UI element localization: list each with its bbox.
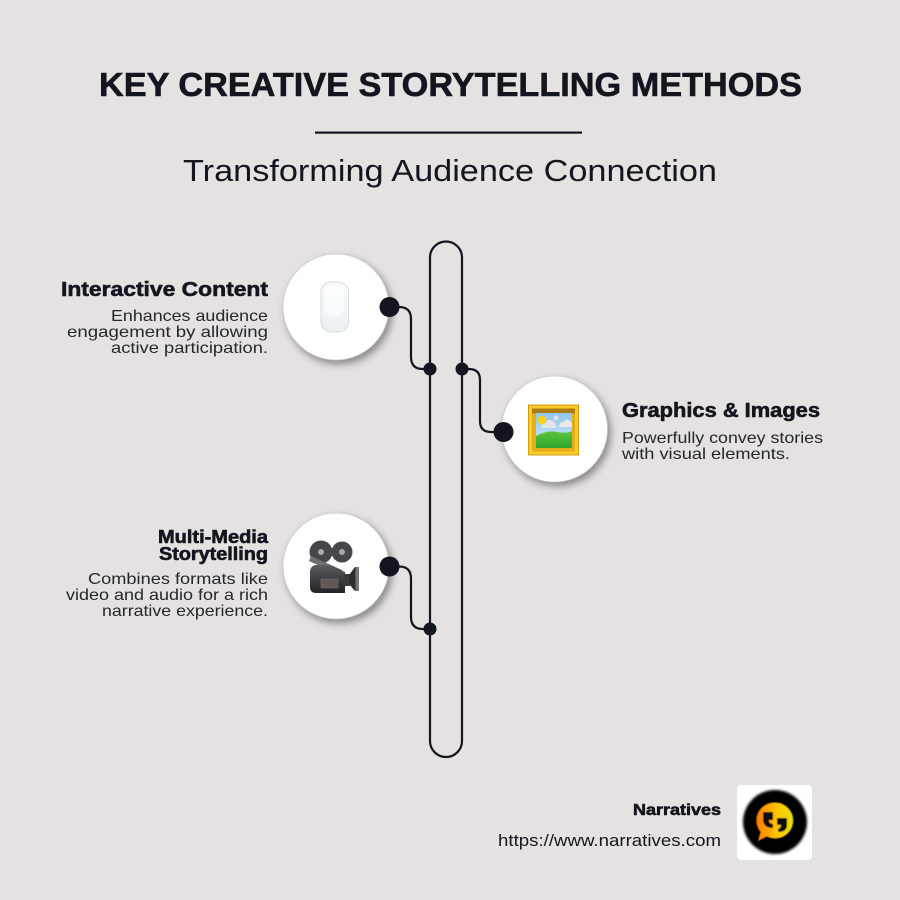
connector: graphics and images (456, 362, 514, 442)
footer: brand (498, 785, 812, 860)
title: KEY CREATIVE STORYTELLING METHODS (99, 66, 802, 103)
title divider (315, 132, 582, 134)
icon circle: framed picture (502, 376, 608, 482)
text: multi-media description: Combines formats like (88, 571, 268, 588)
text: graphics and images description (621, 430, 823, 463)
text: graphics and images description: Powerfully convey stories (622, 430, 823, 447)
panel: multi-media storytelling (66, 513, 436, 636)
text: graphics and images description: with visual elements. (621, 446, 790, 463)
heading: multi-media storytelling (158, 527, 269, 564)
text: interactive content description: engagement by allowing (67, 324, 268, 341)
text: interactive content description (67, 308, 268, 357)
timeline capsule (430, 242, 462, 757)
connector: interactive content (380, 297, 436, 376)
panel: graphics and images (456, 362, 823, 482)
text: interactive content description: active participation. (111, 340, 268, 357)
logo (737, 785, 812, 860)
connector: multi-media storytelling (380, 556, 436, 636)
heading: multi-media storytelling: Multi-Media (158, 527, 269, 547)
brand url: https://www.narratives.com (498, 831, 721, 850)
text: interactive content description: Enhances audience (111, 308, 268, 325)
subtitle: Transforming Audience Connection (183, 153, 717, 188)
heading: multi-media storytelling: Storytelling (159, 544, 268, 564)
heading: graphics and images: Graphics & Images (622, 400, 820, 422)
text: multi-media description (66, 571, 268, 620)
heading: interactive content: Interactive Content (61, 279, 268, 301)
text: multi-media description: narrative experience. (102, 603, 268, 620)
text: multi-media description: video and audio for a rich (66, 587, 268, 604)
icon circle: mouse (283, 254, 389, 360)
panel: interactive content (61, 254, 436, 376)
brand name: Narratives (633, 802, 721, 819)
icon circle: movie camera (283, 513, 389, 619)
